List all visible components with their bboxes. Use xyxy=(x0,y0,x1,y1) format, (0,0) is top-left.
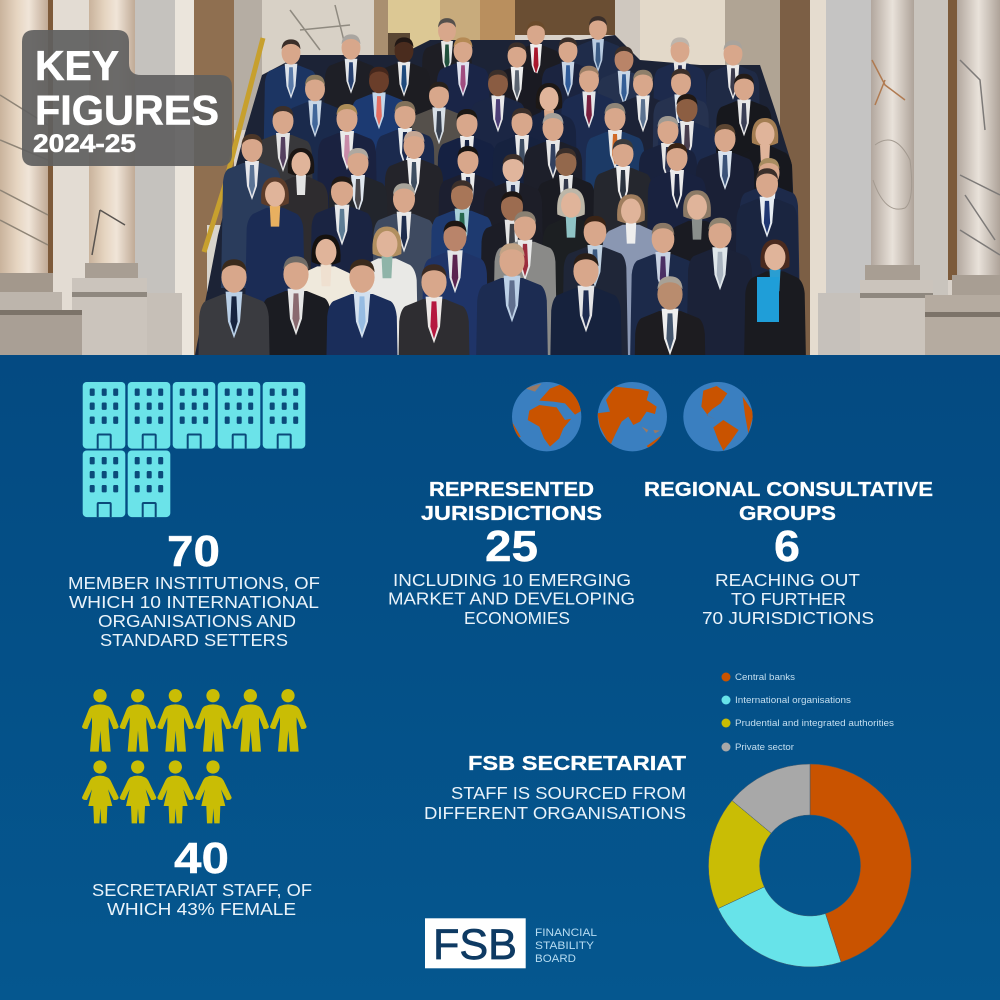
stat: represented jurisdictions: JURISDICTIONS xyxy=(421,502,602,525)
FSB logo: STABILITY xyxy=(535,940,594,952)
stat: secretariat staff xyxy=(92,834,312,919)
stat: member institutions: MEMBER INSTITUTIONS, OF xyxy=(68,573,320,593)
chart legend: Prudential and integrated authorities xyxy=(735,718,894,728)
stat: represented jurisdictions xyxy=(388,478,635,628)
chart legend: Central banks xyxy=(735,672,795,682)
stat: member institutions: WHICH 10 INTERNATIONAL xyxy=(69,592,319,612)
stat: regional consultative groups: REACHING OUT xyxy=(715,570,860,590)
heading: FSB secretariat xyxy=(424,752,687,823)
title badge: key figures: FIGURES xyxy=(35,86,219,134)
stat: member institutions: ORGANISATIONS AND xyxy=(98,611,296,631)
donut chart xyxy=(708,764,911,967)
stat: represented jurisdictions: MARKET AND DEVELOPING xyxy=(388,588,635,608)
stat: secretariat staff: 40 xyxy=(174,834,229,883)
chart legend: International organisations xyxy=(735,695,851,705)
heading: FSB secretariat: STAFF IS SOURCED FROM xyxy=(451,783,686,803)
stat: member institutions: STANDARD SETTERS xyxy=(100,630,288,650)
delegates group xyxy=(195,16,806,355)
title badge: key figures: KEY xyxy=(35,42,119,89)
stat: represented jurisdictions: INCLUDING 10 EMERGING xyxy=(393,570,631,590)
stat: regional consultative groups xyxy=(644,478,933,628)
photo: delegates on marble staircase xyxy=(0,0,1000,355)
stat: regional consultative groups: 6 xyxy=(774,522,800,571)
stat: regional consultative groups: TO FURTHER xyxy=(731,589,846,609)
FSB logo: FINANCIAL xyxy=(535,927,597,939)
stat: regional consultative groups: 70 JURISDICTIONS xyxy=(702,608,874,628)
chart legend: Private sector xyxy=(735,742,794,752)
icon: seven buildings xyxy=(83,382,305,517)
stat: member institutions xyxy=(68,527,320,650)
gold stair rail xyxy=(204,38,263,252)
stat: represented jurisdictions: ECONOMIES xyxy=(464,608,570,628)
stat: member institutions: 70 xyxy=(167,527,220,576)
heading: FSB secretariat: DIFFERENT ORGANISATIONS xyxy=(424,803,686,823)
FSB logo: FSB xyxy=(433,921,517,969)
stat: represented jurisdictions: 25 xyxy=(485,522,538,571)
FSB logo xyxy=(425,918,597,969)
stat: represented jurisdictions: REPRESENTED xyxy=(429,478,594,501)
stat: regional consultative groups: GROUPS xyxy=(739,502,836,525)
marble hall backdrop xyxy=(0,0,1000,355)
icon: three globes xyxy=(510,382,754,451)
stat: secretariat staff: SECRETARIAT STAFF, OF xyxy=(92,880,312,900)
stat: secretariat staff: WHICH 43% FEMALE xyxy=(107,899,296,919)
title badge: key figures xyxy=(22,30,232,166)
FSB logo: BOARD xyxy=(535,953,576,965)
title badge: key figures: 2024-25 xyxy=(33,130,136,158)
icon: staff pictograms xyxy=(82,689,307,823)
stat: regional consultative groups: REGIONAL CONSULTATIVE xyxy=(644,478,933,501)
heading: FSB secretariat: FSB SECRETARIAT xyxy=(468,752,687,775)
chart legend xyxy=(722,672,894,752)
